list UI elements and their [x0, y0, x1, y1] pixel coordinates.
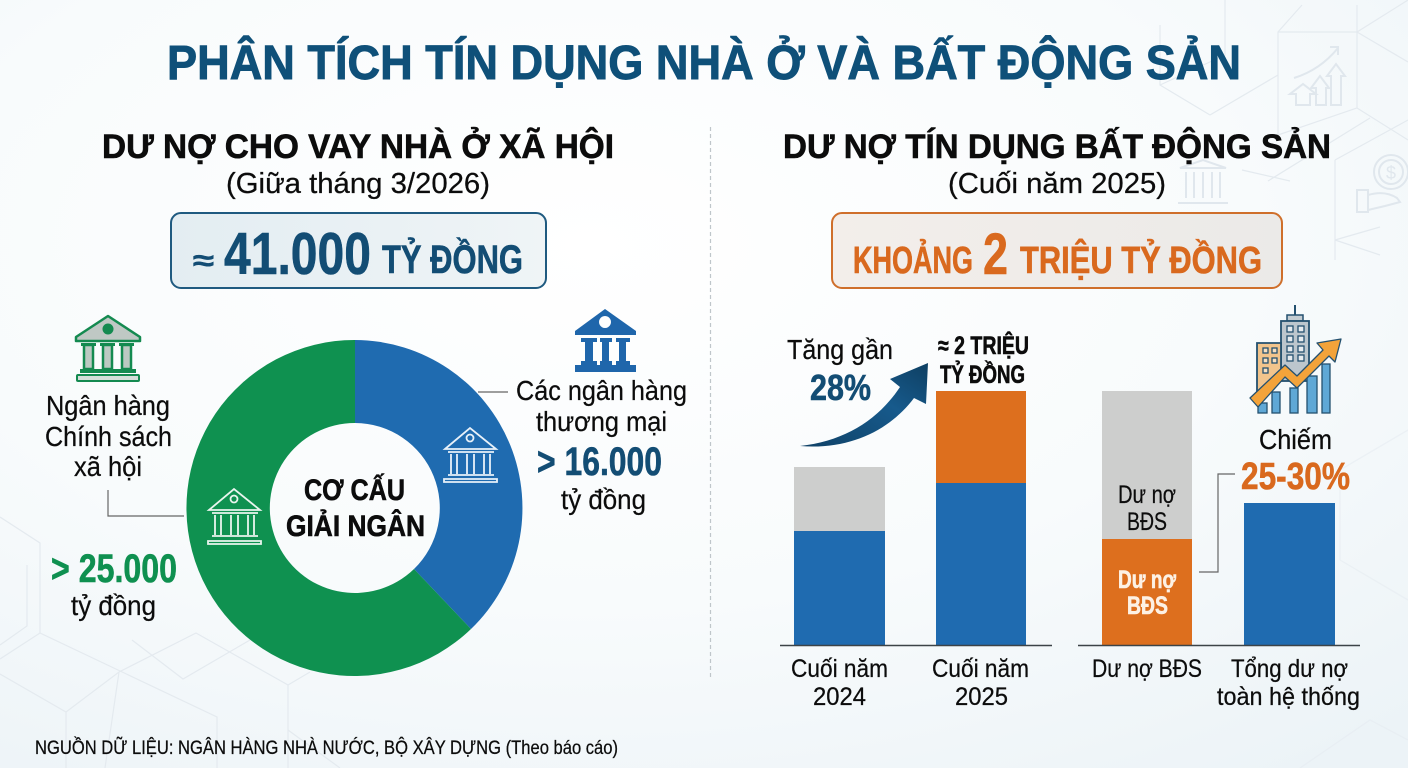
icon: faint coin in hand	[1357, 155, 1408, 212]
bar: real estate debt: BĐS	[1127, 508, 1167, 536]
icon: bank outline on blue segment	[444, 428, 497, 482]
bar chart: growth 2024 to 2025	[780, 330, 1052, 711]
icon: faint bank	[1178, 160, 1228, 203]
donut centre label: CƠ CẤU	[304, 473, 405, 507]
panel: real estate credit	[35, 127, 1360, 759]
bar total label	[938, 330, 1029, 389]
donut centre label: GIẢI NGÂN	[286, 509, 425, 543]
callout: 41.000 tỷ đồng: TỶ ĐỒNG	[382, 236, 523, 282]
text: growth nearly 28%	[787, 334, 893, 408]
heading: real estate credit: DƯ NỢ TÍN DỤNG BẤT ĐỘNG SẢN	[783, 127, 1331, 166]
source note: NGUỒN DỮ LIỆU: NGÂN HÀNG NHÀ NƯỚC, BỘ XÂY DỰNG (Theo báo cáo)	[35, 737, 618, 759]
text: growth nearly 28%: Tăng gần	[787, 334, 893, 365]
value: over 16.000: > 16.000	[537, 440, 662, 484]
axis label: 2024: 2024	[813, 683, 866, 711]
bar: real estate debt	[1102, 391, 1192, 645]
axis label: system total: Tổng dư nợ	[1231, 655, 1348, 683]
axis label: system total	[1217, 655, 1360, 711]
label group: social policy bank	[45, 316, 184, 621]
axis label: 2025	[932, 655, 1029, 711]
label group: commercial banks	[478, 309, 687, 515]
leader line right	[478, 391, 508, 393]
text: social policy bank name	[45, 390, 172, 482]
arrow: growth	[800, 363, 928, 447]
value: over 25.000	[51, 547, 177, 621]
value: over 16.000: tỷ đồng	[561, 484, 646, 515]
text: social policy bank name: Ngân hàng	[46, 390, 170, 421]
axis label: 2025: Cuối năm	[932, 655, 1029, 683]
text: share 25-30%: 25-30%	[1241, 456, 1350, 498]
icon: blue bank	[575, 309, 636, 372]
divider	[710, 127, 712, 678]
bar: real estate debt: Dư nợ	[1118, 481, 1176, 509]
axis label: real estate debt: Dư nợ BĐS	[1092, 655, 1202, 683]
callout: 41.000 tỷ đồng	[171, 213, 546, 288]
bar: end of 2025	[936, 391, 1026, 645]
bar: end of 2024	[794, 467, 885, 645]
text: share 25-30%: Chiếm	[1259, 424, 1332, 455]
heading: social housing: DƯ NỢ CHO VAY NHÀ Ở XÃ HỘI	[102, 127, 614, 166]
axis label: 2025: 2025	[955, 683, 1008, 711]
text: commercial banks name	[516, 375, 687, 437]
subheading: year end: (Cuối năm 2025)	[948, 168, 1166, 200]
callout: about 2 million billion: TRIỆU TỶ ĐỒNG	[1020, 238, 1262, 282]
text: $	[1386, 163, 1396, 183]
value: over 25.000: tỷ đồng	[71, 590, 156, 621]
leader line left	[108, 490, 184, 516]
axis label: 2024	[791, 655, 888, 711]
axis label: system total: toàn hệ thống	[1217, 683, 1360, 711]
value: over 25.000: > 25.000	[51, 547, 177, 591]
icon: green bank	[76, 316, 140, 381]
donut chart: disbursement structure	[186, 340, 522, 676]
bar chart: share of system credit	[1078, 305, 1360, 711]
callout: 41.000 tỷ đồng: 41.000	[224, 221, 371, 287]
callout: 41.000 tỷ đồng: ≈	[193, 245, 214, 276]
icon: city and rising arrow	[1250, 305, 1341, 413]
bar: system total	[1244, 503, 1335, 645]
text: share 25-30%	[1241, 424, 1350, 498]
text: commercial banks name: thương mại	[536, 406, 667, 437]
bar: real estate debt: Dư nợ	[1118, 566, 1176, 594]
axis label: 2024: Cuối năm	[791, 655, 888, 683]
leader line share	[1199, 474, 1235, 572]
bar total label: ≈ 2 TRIỆU	[938, 330, 1029, 360]
subheading: date: (Giữa tháng 3/2026)	[226, 168, 490, 200]
text: social policy bank name: xã hội	[74, 451, 142, 482]
callout: about 2 million billion: 2	[983, 222, 1008, 287]
text: commercial banks name: Các ngân hàng	[516, 375, 687, 406]
callout: about 2 million billion: KHOẢNG	[853, 238, 973, 282]
bar total label: TỶ ĐỒNG	[940, 359, 1025, 389]
text: social policy bank name: Chính sách	[45, 421, 172, 452]
icon: faint rising chart	[1290, 47, 1345, 105]
title: PHÂN TÍCH TÍN DỤNG NHÀ Ở VÀ BẤT ĐỘNG SẢN	[167, 35, 1241, 90]
icon: bank outline on green segment	[208, 489, 261, 544]
text: growth nearly 28%: 28%	[810, 367, 871, 408]
callout: about 2 million billion	[832, 213, 1282, 288]
donut centre label	[286, 473, 425, 543]
panel: social housing loans	[45, 127, 687, 676]
bar: real estate debt: BĐS	[1127, 592, 1168, 620]
value: over 16.000	[537, 440, 662, 515]
